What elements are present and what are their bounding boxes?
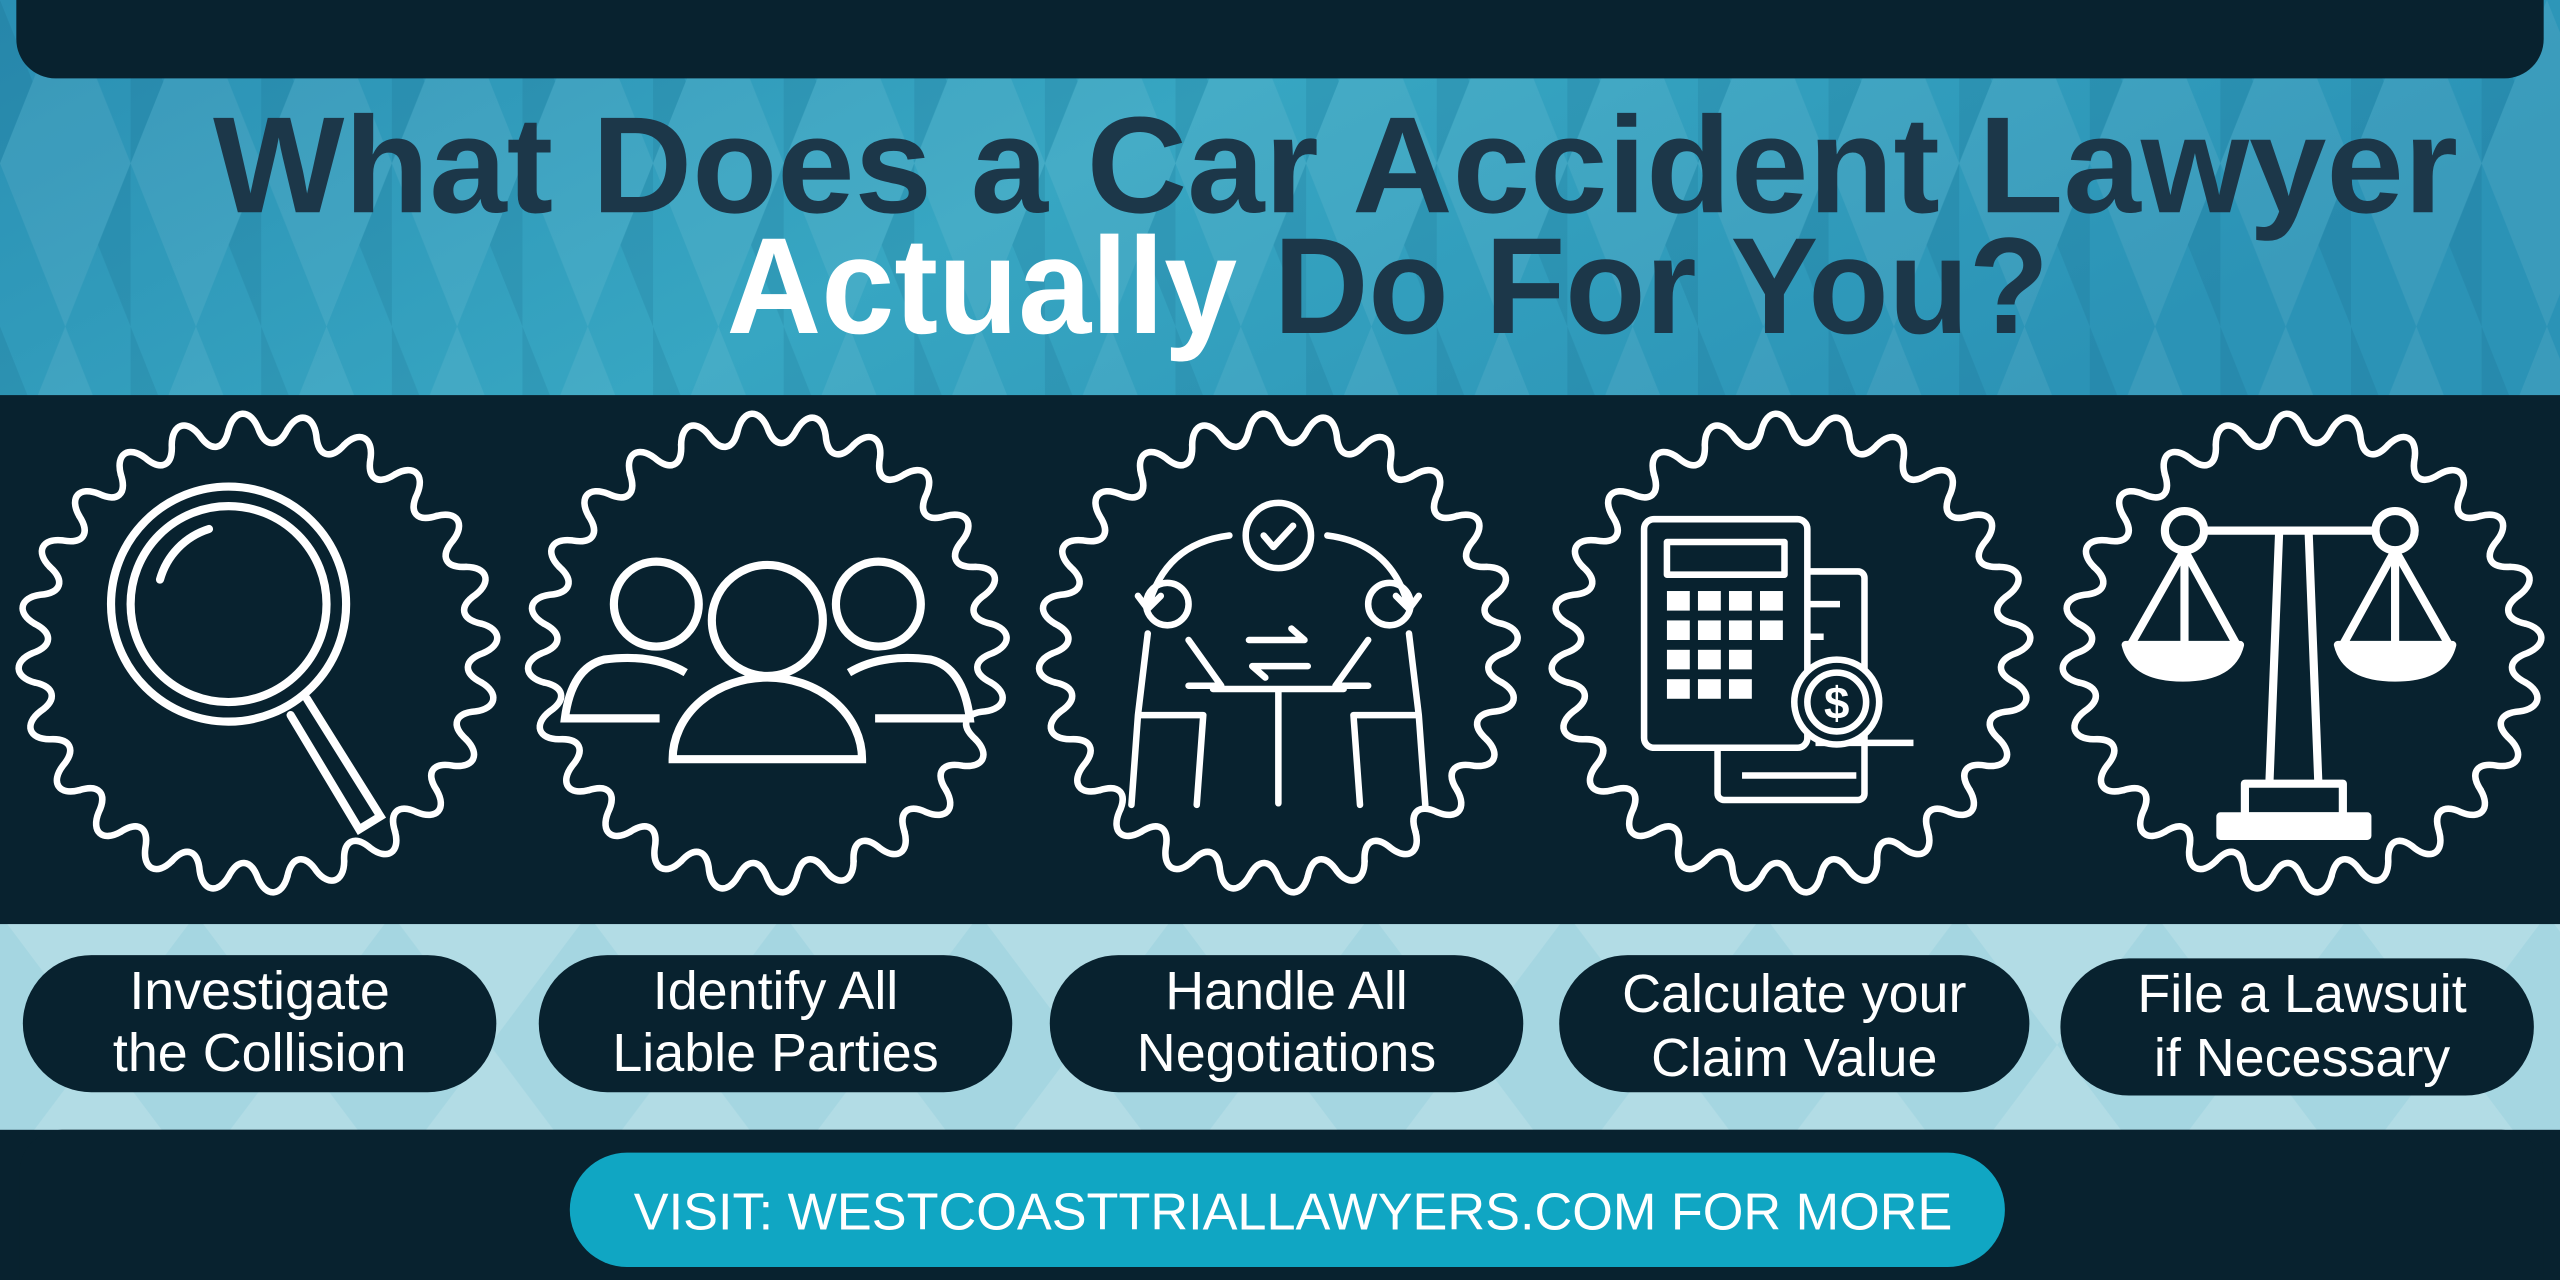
badge: calculator bbox=[1552, 414, 2030, 892]
CTA pill bbox=[570, 1153, 2005, 1267]
badge: magnifier bbox=[19, 414, 497, 892]
pill: Identify All Liable Parties: Liable Parties bbox=[612, 1023, 939, 1083]
pill: File a Lawsuit if Necessary: if Necessary bbox=[2154, 1028, 2450, 1088]
pill: Investigate the Collision: the Collision bbox=[113, 1023, 406, 1083]
light band background bbox=[0, 924, 2560, 1130]
title bbox=[213, 89, 2458, 363]
pill: Investigate the Collision: Investigate bbox=[129, 961, 390, 1021]
pill: Handle All Negotiations: Negotiations bbox=[1137, 1023, 1436, 1083]
pill: Calculate your Claim Value: Calculate your bbox=[1622, 964, 1966, 1024]
top dark bar bbox=[16, 0, 2544, 78]
pill: Calculate your Claim Value bbox=[1559, 955, 2029, 1092]
badge: people bbox=[528, 414, 1007, 892]
dark icon band bbox=[0, 395, 2560, 924]
badge: scales of justice bbox=[2063, 414, 2541, 892]
title: What Does a Car Accident Lawyer bbox=[213, 89, 2458, 242]
title: Actually Do For You? bbox=[727, 210, 2049, 363]
badge: calculator: $ bbox=[1824, 677, 1849, 728]
pill: Calculate your Claim Value: Claim Value bbox=[1651, 1028, 1937, 1088]
pill: Identify All Liable Parties bbox=[539, 955, 1012, 1092]
pill: Handle All Negotiations: Handle All bbox=[1165, 961, 1408, 1021]
pill: Identify All Liable Parties: Identify All bbox=[653, 961, 898, 1021]
bottom bar with CTA bbox=[20, 1130, 2544, 1280]
background: patterned blue header bbox=[0, 0, 2560, 398]
pill: File a Lawsuit if Necessary: File a Lawsuit bbox=[2137, 964, 2467, 1024]
badge: negotiation bbox=[1039, 414, 1518, 892]
pill: Investigate the Collision bbox=[23, 955, 496, 1092]
pill: File a Lawsuit if Necessary bbox=[2060, 958, 2534, 1096]
pill: Handle All Negotiations bbox=[1050, 955, 1523, 1092]
CTA pill: VISIT: WESTCOASTTRIALLAWYERS.COM FOR MORE bbox=[634, 1183, 1952, 1241]
